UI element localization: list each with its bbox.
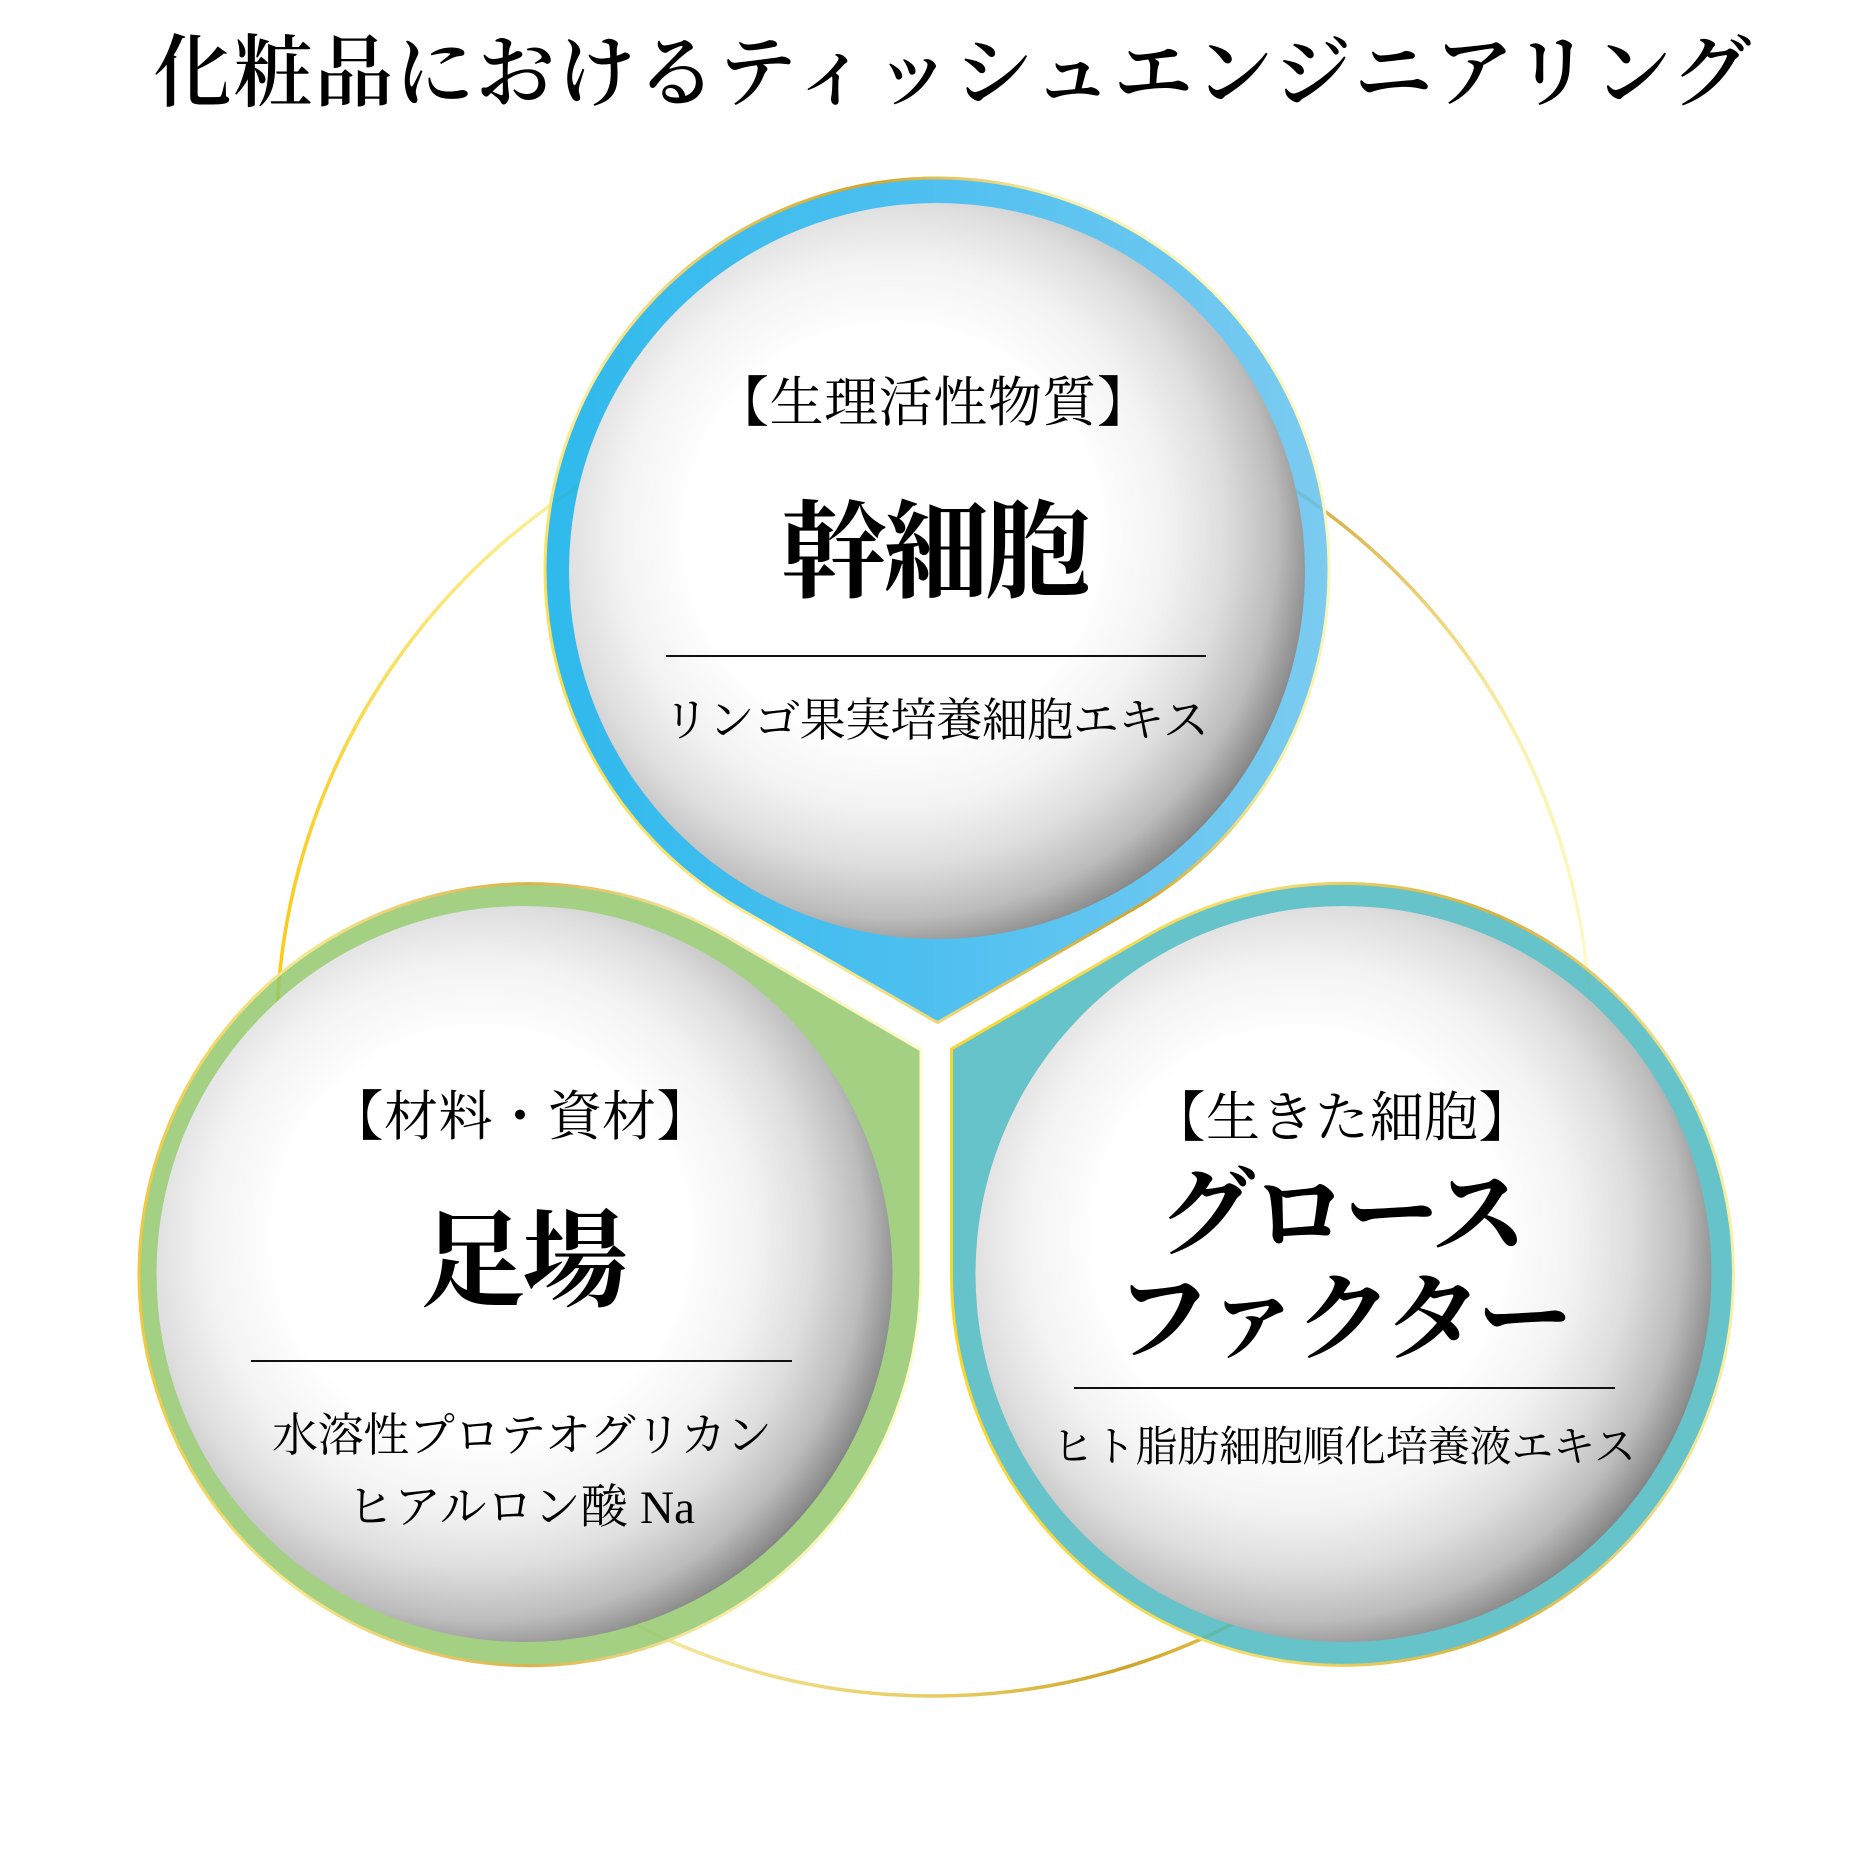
teardrop: green frame	[139, 884, 921, 1666]
ingredient text lines: 水溶性プロテオグリカン	[272, 1410, 772, 1461]
divider line	[251, 1360, 792, 1362]
sphere: top	[569, 203, 1305, 939]
ingredient text: ヒト脂肪細胞順化培養液エキス	[1052, 1425, 1636, 1471]
title: 化粧品におけるティッシュエンジニアリング	[153, 31, 1751, 118]
label: bioactive substance: 【生理活性物質】	[715, 373, 1151, 433]
heading: growth factor: ファクター	[1115, 1266, 1573, 1373]
label: living cells: 【生きた細胞】	[1152, 1088, 1532, 1148]
heading: growth factor	[1115, 1161, 1573, 1373]
heading: scaffold: 足場	[420, 1204, 628, 1321]
panel: growth factor (right)	[952, 883, 1733, 1665]
label: materials: 【材料・資材】	[330, 1087, 710, 1147]
panel: scaffold (left)	[139, 884, 921, 1666]
sphere: left	[156, 906, 892, 1642]
ingredient text: リンゴ果実培養細胞エキス	[663, 695, 1209, 746]
teardrop: blue frame	[545, 178, 1329, 1023]
ingredient text lines: ヒアルロン酸 Na	[347, 1482, 695, 1534]
divider line	[666, 655, 1206, 657]
large connecting gold ring	[276, 382, 1590, 1696]
ingredient text lines	[272, 1410, 772, 1534]
heading: stem cells: 幹細胞	[781, 495, 1091, 612]
heading: growth factor: グロース	[1159, 1161, 1527, 1268]
divider line	[1074, 1387, 1615, 1389]
sphere: right	[976, 906, 1712, 1642]
panel: stem cells (top)	[545, 178, 1329, 1023]
teardrop: teal frame	[952, 883, 1733, 1665]
